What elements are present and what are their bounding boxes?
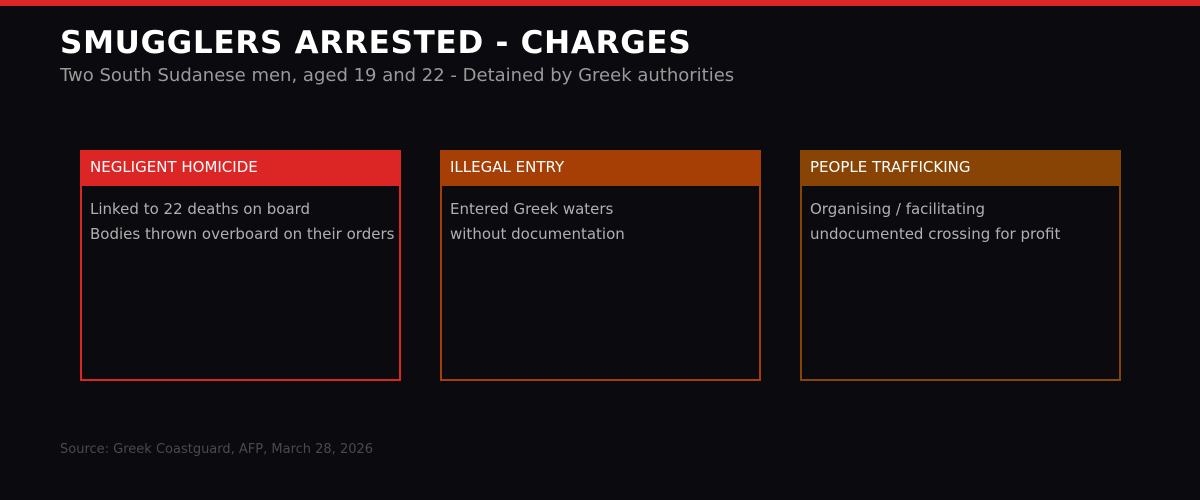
panel: people trafficking: PEOPLE TRAFFICKING bbox=[810, 158, 970, 176]
panel: people trafficking bbox=[800, 150, 1121, 381]
panel: negligent homicide: Linked to 22 deaths on board bbox=[90, 200, 310, 218]
panel: negligent homicide bbox=[80, 150, 401, 381]
source: Source: Greek Coastguard, AFP, March 28, 2026 bbox=[60, 442, 373, 457]
title: SMUGGLERS ARRESTED - CHARGES bbox=[60, 25, 691, 61]
panel: illegal entry: ILLEGAL ENTRY bbox=[450, 158, 564, 176]
panel: people trafficking: Organising / facilitating bbox=[810, 200, 985, 218]
panel: illegal entry: without documentation bbox=[450, 225, 625, 243]
panel: people trafficking: undocumented crossing for profit bbox=[810, 225, 1060, 243]
panel: negligent homicide: Bodies thrown overboard on their orders bbox=[90, 225, 394, 243]
panel: negligent homicide: NEGLIGENT HOMICIDE bbox=[90, 158, 258, 176]
subtitle: Two South Sudanese men, aged 19 and 22 - Detained by Greek authorities bbox=[60, 65, 734, 86]
panel: illegal entry bbox=[440, 150, 761, 381]
panel: illegal entry: Entered Greek waters bbox=[450, 200, 613, 218]
